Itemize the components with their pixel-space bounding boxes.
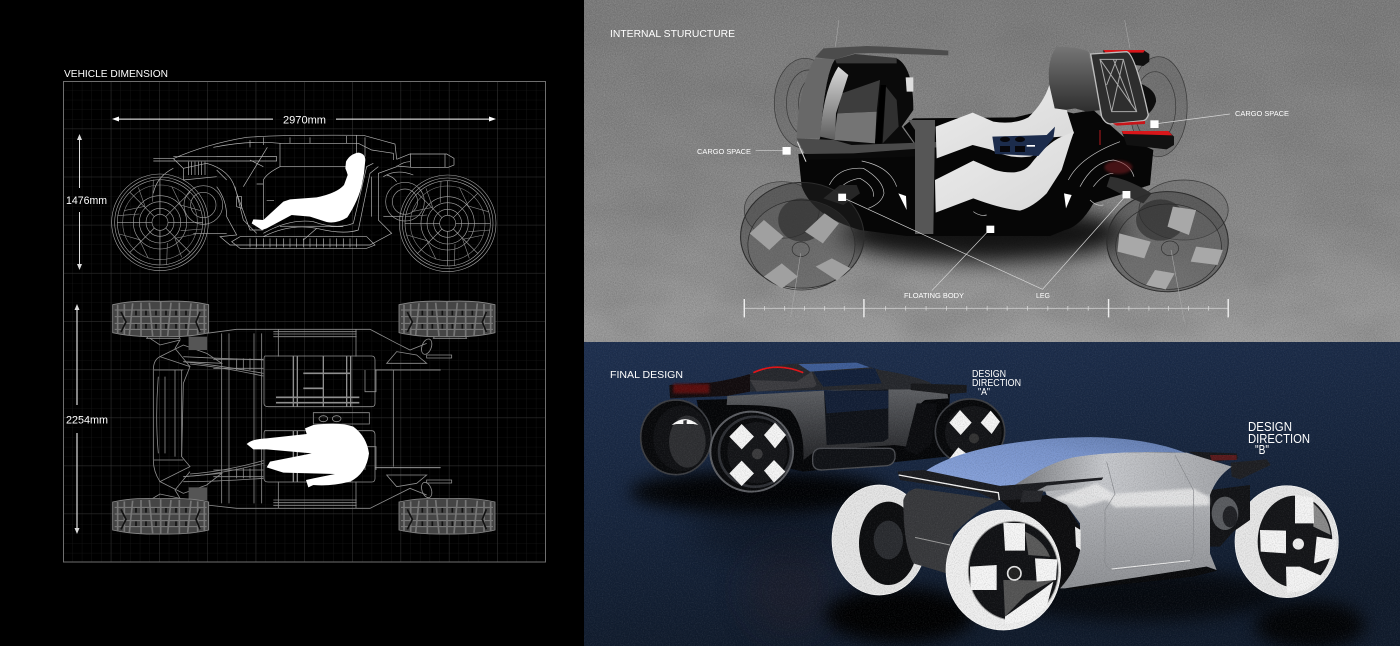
dimension: width 2970mm: 2970mm bbox=[283, 114, 326, 126]
B rear deck bbox=[1188, 452, 1238, 463]
center column bbox=[908, 120, 935, 234]
dimension: width 2970mm bbox=[112, 114, 496, 126]
dimension: length 2254mm bbox=[66, 304, 108, 534]
label: design direction B: DIRECTION bbox=[1248, 431, 1310, 446]
grain overlay bbox=[584, 342, 1400, 646]
ghost front wheels bbox=[741, 182, 1228, 292]
left cargo module bbox=[797, 46, 948, 162]
label: leg: LEG bbox=[1036, 291, 1050, 300]
driver silhouette top bbox=[247, 424, 369, 487]
ghost front wheels and annotations bbox=[741, 20, 1230, 322]
panel: internal structure bbox=[584, 0, 1400, 342]
B far wheel bbox=[1235, 486, 1338, 598]
scale ruler bbox=[744, 299, 1228, 317]
label: design direction B: DESIGN bbox=[1248, 419, 1292, 434]
B rear wheel bbox=[832, 485, 927, 595]
vehicle core bbox=[797, 46, 1174, 236]
A far wheel bbox=[935, 399, 1005, 464]
B front light bar bbox=[897, 470, 1103, 501]
floor shadows and reflections bbox=[630, 470, 1365, 646]
A body side bbox=[727, 387, 948, 460]
blueprint grid frame bbox=[63, 81, 546, 562]
label: floating body: FLOATING BODY bbox=[904, 291, 964, 300]
label: design direction A: DESIGN bbox=[972, 369, 1006, 380]
leg mounts and drums bbox=[829, 142, 1134, 215]
heading: vehicle dimension: VEHICLE DIMENSION bbox=[64, 68, 168, 80]
B shoulder and side bbox=[1043, 463, 1232, 588]
wheel: side front bbox=[399, 175, 496, 272]
B skirt bbox=[1065, 567, 1217, 589]
dark backrest fin bbox=[1049, 47, 1102, 112]
A dark underbody mass bbox=[697, 393, 950, 472]
dimension: length 2254mm: 2254mm bbox=[66, 414, 108, 426]
car: internal structure render bbox=[741, 20, 1230, 322]
marker squares bbox=[782, 120, 1159, 233]
A rear wheel bbox=[641, 400, 711, 475]
wireframe: top body bbox=[147, 329, 467, 508]
car: design direction B bbox=[832, 437, 1338, 630]
label: design direction A: DIRECTION bbox=[972, 378, 1021, 389]
B front wheel bbox=[946, 510, 1061, 630]
label: design direction A: "A" bbox=[978, 387, 990, 398]
car: design direction A bbox=[641, 362, 1005, 492]
label: design direction A bbox=[972, 369, 1021, 398]
label: cargo space left: CARGO SPACE bbox=[697, 147, 751, 156]
B rear drum bbox=[1208, 485, 1250, 547]
label: design direction B: "B" bbox=[1255, 442, 1269, 457]
right cargo module bbox=[1091, 50, 1174, 149]
A skirt bbox=[813, 448, 895, 470]
label: design direction B bbox=[1248, 419, 1310, 457]
leader lines bbox=[756, 20, 1230, 322]
tires: top view bbox=[113, 301, 495, 534]
heading: final design: FINAL DESIGN bbox=[610, 369, 683, 381]
A roof bbox=[750, 362, 932, 392]
wheel: side rear bbox=[112, 174, 208, 271]
seat: upper bbox=[936, 85, 1074, 158]
panel: final design bbox=[584, 342, 1400, 646]
A front wheel bbox=[710, 412, 793, 492]
label: cargo space right: CARGO SPACE bbox=[1235, 109, 1289, 118]
panel: vehicle dimension bbox=[0, 0, 584, 646]
red joint glow bbox=[1104, 161, 1132, 174]
driver silhouette side bbox=[252, 153, 365, 230]
side view wireframe with driver bbox=[112, 135, 496, 272]
B roof bbox=[923, 437, 1185, 486]
wireframe: side body bbox=[153, 135, 454, 248]
chassis bbox=[798, 108, 1153, 236]
dimension: height 1476mm: 1476mm bbox=[66, 195, 107, 207]
B wheel arch bbox=[1000, 495, 1080, 588]
A rear deck bbox=[669, 374, 750, 398]
B right bumper bbox=[1231, 459, 1271, 479]
B front housing bbox=[903, 488, 1000, 573]
A bumper bbox=[911, 383, 967, 394]
top view wireframe with driver bbox=[113, 301, 495, 534]
cup holder bbox=[992, 127, 1055, 156]
dimension: height 1476mm bbox=[66, 134, 107, 270]
seat: lower bbox=[935, 132, 1074, 213]
heading: internal structure: INTERNAL STURUCTURE bbox=[610, 28, 735, 40]
ground shadow and ghost rear wheels bbox=[744, 57, 1228, 262]
legs bbox=[823, 177, 1152, 205]
